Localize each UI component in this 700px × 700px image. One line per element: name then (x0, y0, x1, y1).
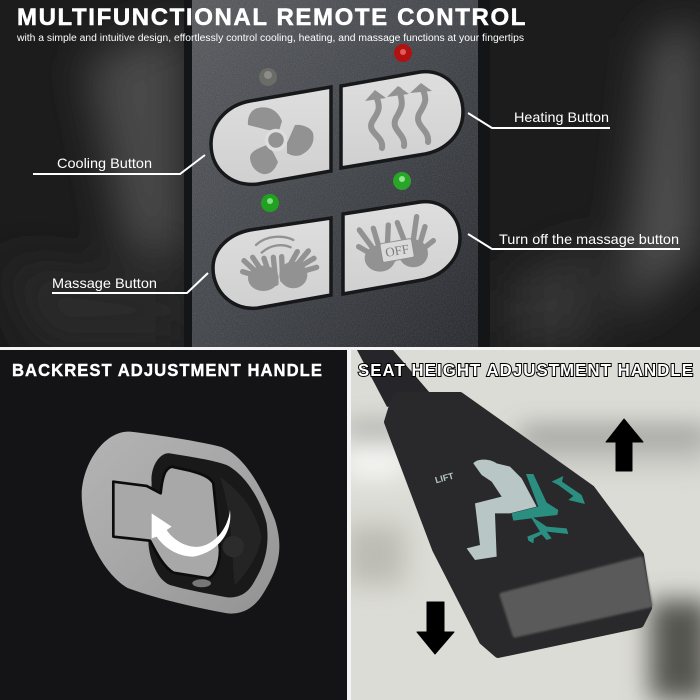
icon: seated figure (434, 460, 585, 560)
label: heating: Heating Button (514, 109, 609, 125)
off tag: OFF (384, 241, 410, 260)
indicator: heating light (394, 44, 412, 62)
title: MULTIFUNCTIONAL REMOTE CONTROL (17, 4, 527, 31)
lever screw (192, 579, 211, 587)
handle lever (113, 467, 220, 578)
label: cooling: Cooling Button (57, 155, 152, 171)
subtitle: with a simple and intuitive design, effortlessly control cooling, heating, and massage functions at your fingertips (16, 33, 524, 44)
label: lift: LIFT (434, 471, 455, 485)
heading: seat height: SEAT HEIGHT ADJUSTMENT HANDLE (358, 360, 694, 380)
arrow: up (606, 419, 643, 471)
label: turn off: Turn off the massage button (499, 231, 679, 247)
arrow: down (417, 602, 454, 654)
arrow: rotate (152, 510, 230, 557)
label: massage: Massage Button (52, 275, 157, 291)
leader line: massage (52, 273, 208, 293)
indicator: off light (393, 172, 411, 190)
control handle (357, 350, 650, 654)
panel: seat height adjustment handle (345, 350, 700, 700)
panel: backrest adjustment handle (0, 350, 347, 700)
indicator: cooling light (259, 68, 277, 86)
indicator: massage light (261, 194, 279, 212)
heading: backrest: BACKREST ADJUSTMENT HANDLE (12, 360, 323, 380)
button: heating (341, 72, 463, 168)
button: cooling (211, 87, 331, 184)
icon: fan (248, 107, 314, 174)
panel: remote control (0, 0, 700, 347)
leader line: cooling (33, 155, 205, 174)
handle recess (148, 453, 268, 597)
remote body (184, 0, 490, 347)
handle plate (82, 432, 279, 614)
button: massage (213, 218, 331, 308)
icon: massage hands (243, 237, 317, 291)
button: turn off massage (343, 202, 460, 294)
icon: teal double arrow (552, 476, 585, 504)
handle front face (502, 559, 650, 635)
leader line: off (468, 234, 680, 249)
leader line: heating (468, 113, 610, 128)
icon: heat waves (371, 88, 428, 148)
